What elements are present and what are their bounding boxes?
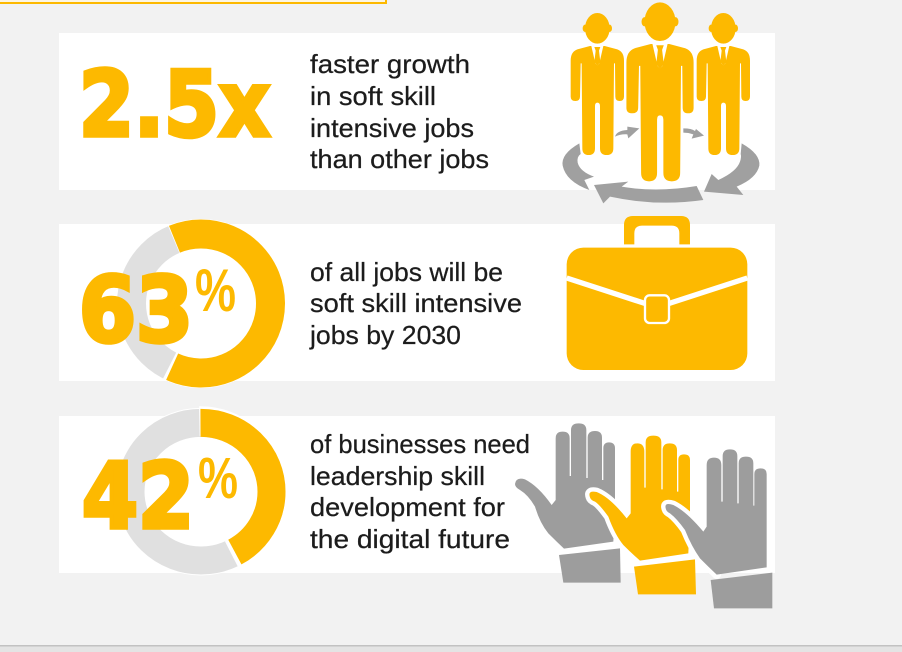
panel: 63 percent [59,213,775,394]
panel: 42 percent [59,416,775,608]
text: faster growth description: than other jobs [310,144,489,174]
text: faster growth description: intensive jobs [310,113,474,143]
text: 42 percent description [310,429,530,554]
text: faster growth description: in soft skill [310,81,436,111]
icon: person left [571,13,624,155]
text: 42 percent description: development for [310,492,505,522]
panel: faster growth [59,2,775,203]
stat: percent sign: % [198,446,238,511]
text: 42 percent description: leadership skill [310,461,485,491]
icon: briefcase [567,216,747,370]
text: 63 percent description: jobs by 2030 [309,320,461,350]
icon: three business people with rotating arrows [562,2,759,203]
icon: centre yellow hand [589,436,696,594]
text: 42 percent description: of businesses need [310,429,530,459]
icon: left grey hand [515,423,621,583]
icon: person centre [626,2,694,181]
icon: three raised hands [515,423,772,608]
icon: right grey hand [665,449,772,608]
donut chart: 63 percent [110,213,292,394]
text: 42 percent description: the digital future [310,524,510,554]
stat: 42: 42 [82,444,194,550]
donut chart: 42 percent [130,420,272,563]
text: faster growth description [310,49,489,174]
stat: 63: 63 [79,258,193,363]
text: 63 percent description: of all jobs will be [310,257,503,287]
text: 63 percent description [309,257,522,350]
stat: percent sign: % [195,257,236,324]
stat: 2.5x: 2.5x [79,52,270,158]
icon: circular grey arrows [562,127,759,203]
icon: person right [697,13,750,155]
text: faster growth description: faster growth [310,49,470,79]
text: 63 percent description: soft skill intensive [310,288,522,318]
